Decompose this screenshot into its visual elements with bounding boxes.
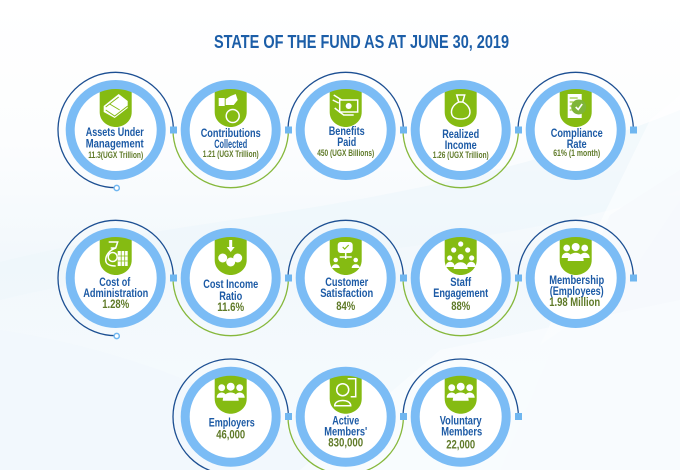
label: Benefits — [329, 126, 365, 138]
panel: Active Members — [288, 371, 403, 470]
label line 2: Engagement — [433, 288, 488, 300]
value: 11.3(UGX Trillion) — [88, 150, 143, 160]
label: Cost of — [99, 277, 130, 289]
label line 2: Income — [445, 140, 477, 152]
label line 2: (Employees) — [550, 286, 604, 298]
panel: Voluntary Members — [403, 359, 518, 462]
label: Contributions — [201, 128, 261, 140]
panel: Benefits Paid — [288, 72, 403, 176]
value: 88% — [451, 299, 470, 313]
icon: money bag and calculator — [106, 242, 128, 266]
icon: satisfied customers — [332, 242, 360, 268]
value: 1.98 Million — [549, 295, 600, 309]
icon: people — [447, 383, 475, 401]
icon: staff group — [446, 241, 476, 269]
label: Employers — [209, 418, 255, 430]
panel: Contributions Collected — [173, 84, 288, 188]
value: 84% — [336, 299, 355, 313]
label line 2: Satisfaction — [320, 288, 373, 300]
icon: cash stack — [104, 94, 128, 118]
panel: Realized Income — [403, 84, 518, 188]
title: STATE OF THE FUND AS AT JUNE 30, 2019 — [214, 32, 509, 52]
label: Cost Income — [203, 279, 258, 291]
icon: member at board — [335, 379, 356, 406]
label: Active — [332, 416, 359, 428]
label line 2: Paid — [337, 137, 356, 149]
panel: Employers — [173, 359, 288, 470]
icon: banknote in hand — [333, 95, 358, 115]
value: 1.21 (UGX Trillion) — [203, 149, 259, 159]
panel: Membership (Employees) — [518, 220, 633, 324]
label line 2: Management — [86, 138, 144, 150]
label line 2: Members' — [324, 427, 367, 439]
value: 450 (UGX Billions) — [317, 148, 374, 158]
panel: Staff Engagement — [403, 232, 518, 336]
panel: Cost of Administration — [58, 220, 173, 339]
label: Staff — [450, 277, 471, 289]
value: 46,000 — [216, 428, 245, 442]
label: Assets Under — [86, 127, 144, 139]
label: Membership — [549, 275, 604, 287]
label line 2: Administration — [83, 288, 148, 300]
value: 1.26 (UGX Trillion) — [433, 150, 489, 160]
value: 22,000 — [446, 438, 475, 452]
panel: Assets Under Management — [58, 72, 173, 191]
panel: Compliance Rate — [518, 72, 633, 176]
icon: checklist document — [568, 94, 586, 118]
label line 2: Collected — [214, 139, 247, 151]
value: 830,000 — [328, 436, 363, 450]
icon: hand and money bag — [219, 94, 239, 122]
label line 2: Rate — [567, 139, 587, 151]
label: Customer — [325, 277, 369, 289]
label: Realized — [442, 129, 479, 141]
label: Voluntary — [440, 416, 482, 428]
connector nodes — [170, 126, 637, 420]
icon: arrow and coins — [218, 240, 242, 266]
label: Compliance — [551, 128, 603, 140]
label line 2: Members — [441, 427, 482, 439]
icon: people — [217, 383, 245, 401]
value: 61% (1 month) — [553, 148, 600, 158]
icon: people — [562, 243, 590, 261]
label line 2: Ratio — [219, 291, 242, 303]
panel: Customer Satisfaction — [288, 220, 403, 324]
icon: money bag — [451, 95, 470, 119]
value: 11.6% — [217, 300, 244, 314]
panel: Cost Income Ratio — [173, 232, 288, 336]
value: 1.28% — [102, 297, 129, 311]
